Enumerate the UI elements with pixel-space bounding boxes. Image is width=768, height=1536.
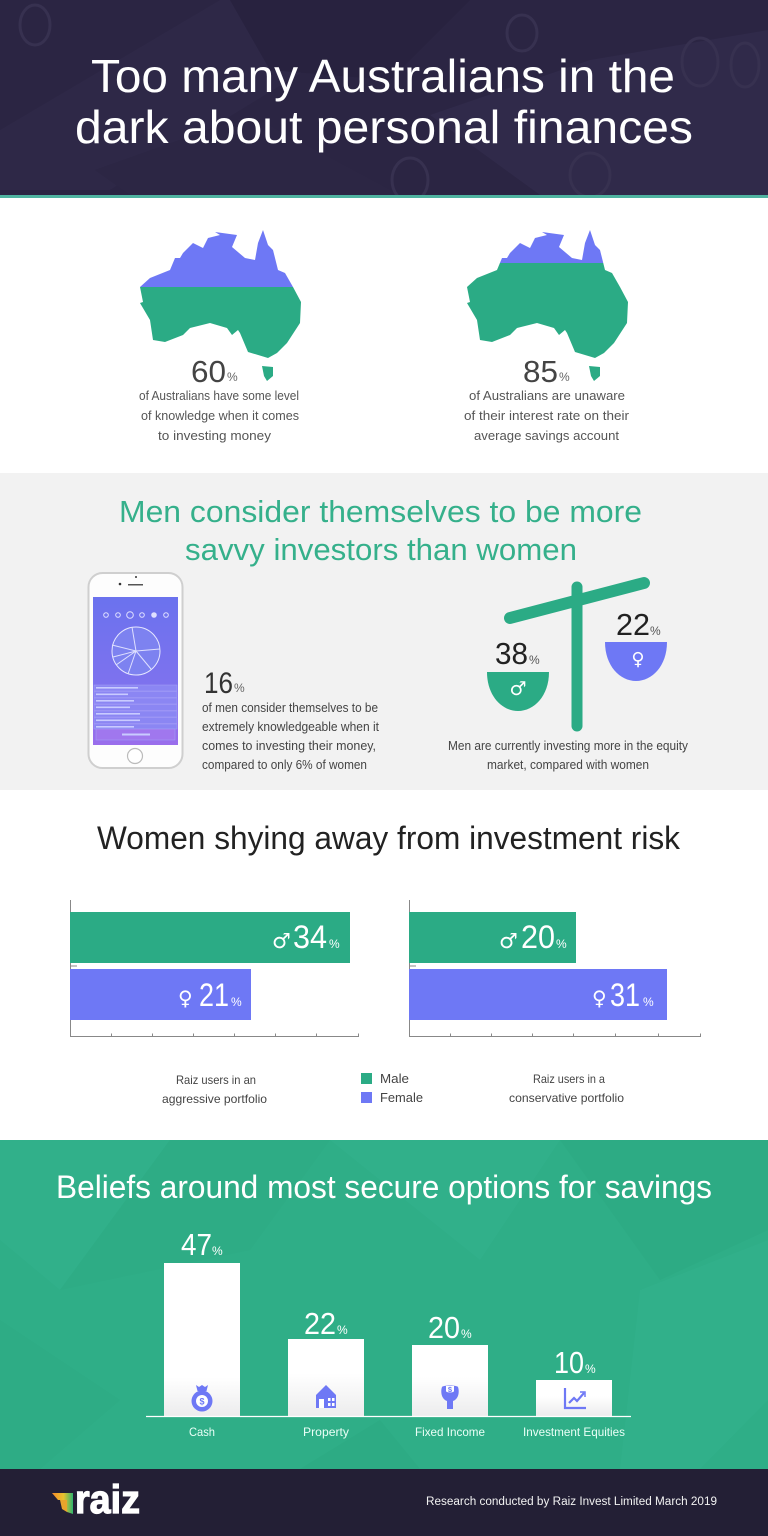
text: 16 percent description: [202, 700, 379, 772]
stat: 38 percent: 38: [495, 636, 528, 671]
bar: male 34 percent: 34: [293, 919, 327, 955]
stat: 16 percent: 16: [204, 667, 233, 700]
bar: fixed income: [412, 1310, 488, 1439]
bar: male 34 percent: %: [329, 937, 340, 951]
stat: 60 percent: 60: [191, 354, 226, 389]
text: 16 percent description: extremely knowledgeable when it: [202, 719, 379, 734]
bar: male 34 percent: ♂: [272, 929, 291, 953]
bar: fixed income: Fixed Income: [415, 1425, 485, 1439]
legend: Male: [380, 1072, 409, 1086]
icon: house: [316, 1385, 336, 1408]
bar: female 21 percent: ♀: [178, 986, 193, 1010]
icon: money bag: [192, 1385, 212, 1412]
text: equity market: market, compared with women: [487, 758, 649, 772]
text: 85 percent description: average savings account: [474, 428, 619, 443]
stat: 22 percent: 22: [616, 607, 650, 642]
bar: property: %: [337, 1323, 348, 1337]
stat: 85 percent: %: [559, 370, 570, 384]
scale pan: male: [487, 672, 549, 711]
stat: 16 percent: %: [234, 681, 245, 695]
text: 60 percent description: to investing money: [158, 428, 272, 443]
legend: [361, 1072, 423, 1105]
bar: female 31 percent: 31: [610, 977, 640, 1013]
chart: conservative portfolio: [409, 900, 701, 1036]
heading: men consider themselves: Men consider themselves to be more: [119, 494, 642, 529]
legend: Female: [380, 1091, 423, 1105]
bar: investment equities: %: [585, 1362, 596, 1376]
text: 85 percent description: of Australians are unaware: [469, 388, 625, 403]
panel: footer: [0, 1469, 768, 1536]
label: conservative portfolio: [509, 1072, 624, 1105]
text: 60 percent description: of knowledge when it comes: [141, 408, 299, 423]
bar: investment equities: 10: [554, 1345, 584, 1380]
heading: women shying away: Women shying away from investment risk: [97, 820, 681, 856]
bar: male 34 percent: [70, 912, 350, 963]
logo: raiz: raiz: [75, 1478, 140, 1522]
bar: cash: 47: [181, 1227, 212, 1262]
scale illustration: [487, 583, 667, 726]
bar: female 21 percent: [70, 969, 251, 1020]
bar: female 31 percent: %: [643, 995, 654, 1009]
label: aggressive portfolio: aggressive portfolio: [162, 1092, 267, 1106]
bar: male 20 percent: %: [556, 937, 567, 951]
panel: investment risk: [0, 790, 768, 1140]
bar: investment equities: Investment Equities: [523, 1425, 625, 1439]
bar: female 31 percent: ♀: [592, 986, 607, 1010]
bar: male 20 percent: 20: [521, 919, 555, 955]
icon: money bag: $: [199, 1396, 205, 1406]
panel: header: [0, 0, 768, 202]
label: conservative portfolio: conservative portfolio: [509, 1091, 624, 1105]
bar: female 31 percent: [409, 969, 667, 1020]
bar: cash: [164, 1227, 240, 1439]
heading: men consider themselves: savvy investors than women: [185, 532, 577, 567]
text: 16 percent description: compared to only 6% of women: [202, 757, 367, 772]
label: aggressive portfolio: [162, 1073, 267, 1106]
text: 60 percent description: [139, 388, 299, 443]
scale pan: male: ♂: [509, 678, 527, 700]
heading: beliefs: Beliefs around most secure options for savings: [56, 1169, 712, 1205]
bar: property: [288, 1306, 364, 1439]
title: dark about personal finances: [75, 101, 693, 153]
bar: cash: %: [212, 1244, 223, 1258]
bar: fixed income: %: [461, 1327, 472, 1341]
stat: 60 percent: %: [227, 370, 238, 384]
bar: investment equities: [523, 1345, 625, 1439]
title: Too many Australians in the: [91, 50, 675, 102]
icon: wrench: $: [448, 1385, 453, 1394]
text: research credit: Research conducted by Raiz Invest Limited March 2019: [426, 1496, 717, 1508]
heading: men consider themselves: [119, 494, 642, 567]
chart: aggressive portfolio: [70, 900, 359, 1036]
bar: female 21 percent: 21: [199, 977, 229, 1013]
text: 16 percent description: comes to investing their money,: [202, 738, 376, 753]
icon: growth chart: [565, 1388, 586, 1408]
label: aggressive portfolio: Raiz users in an: [176, 1073, 256, 1087]
stat: 38 percent: %: [529, 653, 540, 667]
bar chart: savings options: [146, 1227, 631, 1439]
text: 85 percent description: of their interest rate on their: [464, 408, 630, 423]
map: 85 percent: [467, 230, 628, 381]
text: equity market: [448, 739, 689, 772]
bar: male 20 percent: [409, 912, 576, 963]
bar: female 21 percent: %: [231, 995, 242, 1009]
bar: cash: Cash: [189, 1425, 215, 1439]
bar: male 20 percent: ♂: [499, 929, 518, 953]
bar: property: Property: [303, 1425, 349, 1439]
label: conservative portfolio: Raiz users in a: [533, 1072, 605, 1086]
scale pan: female: ♀: [631, 649, 645, 670]
text: 16 percent description: of men consider themselves to be: [202, 700, 378, 715]
map: 60 percent: [140, 230, 301, 381]
stat: 22 percent: %: [650, 624, 661, 638]
text: 60 percent description: of Australians have some level: [139, 388, 299, 403]
title: [75, 50, 693, 153]
text: equity market: Men are currently investing more in the equity: [448, 739, 689, 753]
stat: 85 percent: 85: [523, 354, 558, 389]
text: 85 percent description: [464, 388, 630, 443]
panel: australia stats: [140, 230, 629, 442]
phone illustration: [88, 573, 182, 768]
panel: savvy investors: [0, 473, 768, 790]
panel: secure savings beliefs: [0, 1140, 768, 1469]
scale pan: female: [605, 642, 667, 681]
bar: property: 22: [304, 1306, 336, 1341]
bar: fixed income: 20: [428, 1310, 460, 1345]
